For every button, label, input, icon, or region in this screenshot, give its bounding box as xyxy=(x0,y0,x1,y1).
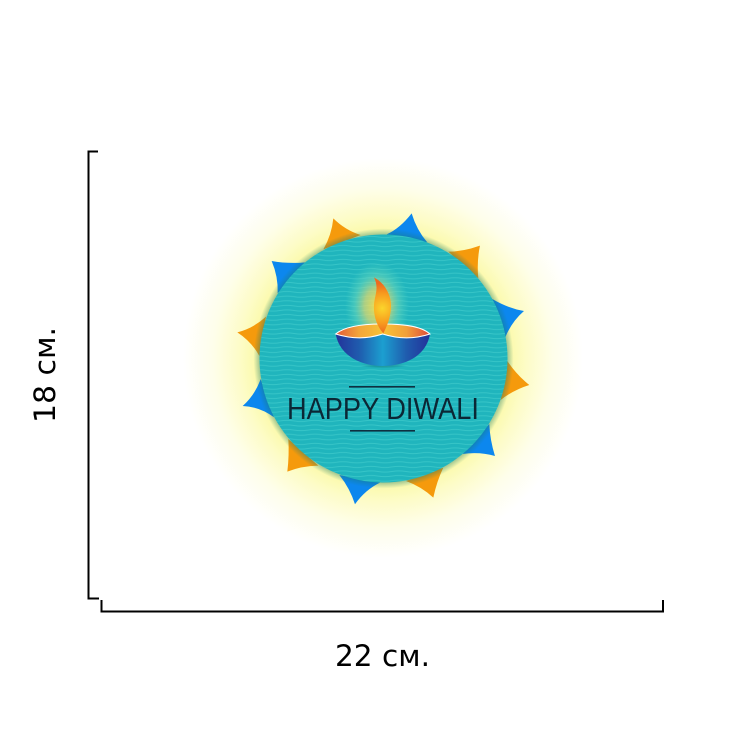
yellow glow xyxy=(183,158,583,558)
orange triangles xyxy=(237,218,529,498)
width label: 22 см. xyxy=(335,639,430,673)
height bracket xyxy=(88,152,99,598)
decorative line below greeting xyxy=(350,430,415,432)
greeting text: HAPPY DIWALI xyxy=(287,391,479,426)
icon: diya lamp xyxy=(336,262,430,368)
height label: 18 см. xyxy=(28,327,62,423)
width bracket xyxy=(102,600,663,612)
bunting triangles xyxy=(237,213,529,504)
decorative line above greeting xyxy=(349,386,415,388)
blue triangles xyxy=(243,213,524,504)
teal medallion xyxy=(254,228,514,488)
